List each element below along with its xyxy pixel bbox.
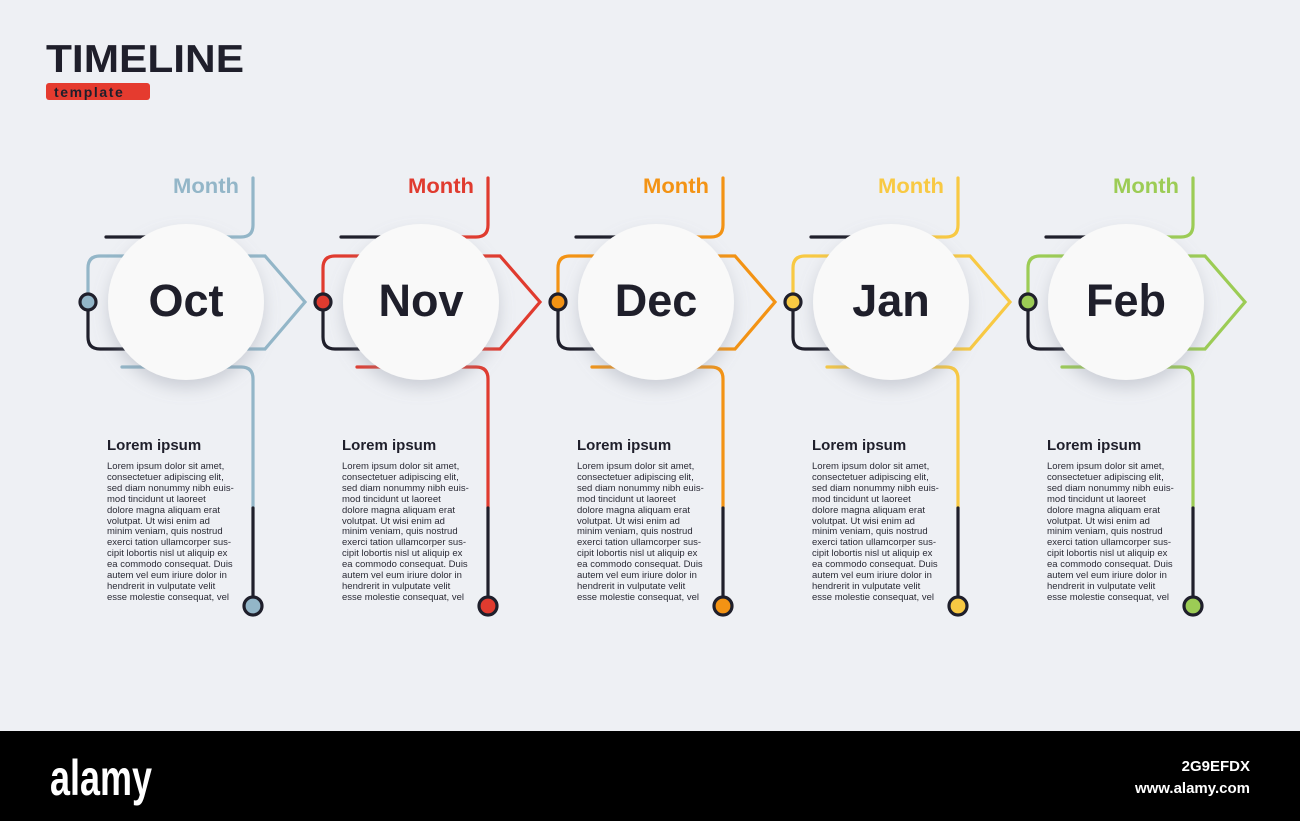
- text block: Feb: cipit lobortis nisl ut aliquip ex: [1047, 548, 1167, 559]
- text block: Oct: minim veniam, quis nostrud: [107, 526, 223, 537]
- text block: Oct: volutpat. Ut wisi enim ad: [107, 516, 210, 527]
- text block: Jan: sed diam nonummy nibh euis-: [812, 483, 939, 494]
- month label: Month: [643, 175, 709, 198]
- text block: Jan: mod tincidunt ut laoreet: [812, 494, 911, 505]
- text block: Oct: sed diam nonummy nibh euis-: [107, 483, 234, 494]
- text block: Oct: Lorem ipsum: [107, 437, 201, 454]
- text block: Feb: exerci tation ullamcorper sus-: [1047, 537, 1171, 548]
- step: Dec: [550, 175, 775, 615]
- title: [46, 38, 244, 100]
- text block: Oct: Lorem ipsum dolor sit amet,: [107, 461, 224, 472]
- title: TIMELINE: [46, 38, 244, 81]
- month circle: [578, 224, 734, 380]
- text block: Feb: consectetuer adipiscing elit,: [1047, 472, 1164, 483]
- text block: Dec: ea commodo consequat. Duis: [577, 559, 703, 570]
- text block: Jan: hendrerit in vulputate velit: [812, 581, 920, 592]
- step: Jan: [785, 175, 1010, 615]
- text block: Dec: exerci tation ullamcorper sus-: [577, 537, 701, 548]
- text block: Feb: sed diam nonummy nibh euis-: [1047, 483, 1174, 494]
- text block: Nov: mod tincidunt ut laoreet: [342, 494, 441, 505]
- step: Dec: Dec: [615, 275, 697, 326]
- text block: Feb: mod tincidunt ut laoreet: [1047, 494, 1146, 505]
- text block: Feb: ea commodo consequat. Duis: [1047, 559, 1173, 570]
- month circle: [343, 224, 499, 380]
- text block: Nov: hendrerit in vulputate velit: [342, 581, 450, 592]
- text block: Dec: dolore magna aliquam erat: [577, 505, 690, 516]
- text block: Oct: cipit lobortis nisl ut aliquip ex: [107, 548, 227, 559]
- text block: Dec: Lorem ipsum dolor sit amet,: [577, 461, 694, 472]
- text block: Nov: sed diam nonummy nibh euis-: [342, 483, 469, 494]
- text block: Dec: mod tincidunt ut laoreet: [577, 494, 676, 505]
- text block: Nov: [342, 437, 469, 603]
- footer bar: 2G9EFDX: [1182, 758, 1250, 775]
- text block: Jan: Lorem ipsum: [812, 437, 906, 454]
- text block: Nov: esse molestie consequat, vel: [342, 592, 464, 603]
- text block: Dec: sed diam nonummy nibh euis-: [577, 483, 704, 494]
- text block: Nov: autem vel eum iriure dolor in: [342, 570, 462, 581]
- text block: Feb: dolore magna aliquam erat: [1047, 505, 1160, 516]
- text block: Dec: Lorem ipsum: [577, 437, 671, 454]
- text block: Oct: consectetuer adipiscing elit,: [107, 472, 224, 483]
- text block: Oct: mod tincidunt ut laoreet: [107, 494, 206, 505]
- text block: Nov: consectetuer adipiscing elit,: [342, 472, 459, 483]
- month label: Month: [173, 175, 239, 198]
- text block: Nov: dolore magna aliquam erat: [342, 505, 455, 516]
- month circle: [108, 224, 264, 380]
- month circle: [813, 224, 969, 380]
- text block: Jan: volutpat. Ut wisi enim ad: [812, 516, 915, 527]
- text block: Feb: volutpat. Ut wisi enim ad: [1047, 516, 1150, 527]
- text block: Dec: esse molestie consequat, vel: [577, 592, 699, 603]
- text block: Nov: volutpat. Ut wisi enim ad: [342, 516, 445, 527]
- step: Oct: Oct: [148, 275, 224, 326]
- month circle: [1048, 224, 1204, 380]
- text block: Feb: Lorem ipsum dolor sit amet,: [1047, 461, 1164, 472]
- text block: Jan: ea commodo consequat. Duis: [812, 559, 938, 570]
- text block: Feb: autem vel eum iriure dolor in: [1047, 570, 1167, 581]
- text block: Dec: consectetuer adipiscing elit,: [577, 472, 694, 483]
- text block: Jan: exerci tation ullamcorper sus-: [812, 537, 936, 548]
- text block: Dec: hendrerit in vulputate velit: [577, 581, 685, 592]
- text block: Dec: cipit lobortis nisl ut aliquip ex: [577, 548, 697, 559]
- text block: Jan: dolore magna aliquam erat: [812, 505, 925, 516]
- step: Feb: [1020, 175, 1245, 615]
- text block: Feb: Lorem ipsum: [1047, 437, 1141, 454]
- footer bar: alamy: [50, 750, 152, 806]
- text block: Oct: esse molestie consequat, vel: [107, 592, 229, 603]
- subtitle tag: [46, 83, 150, 100]
- text block: Feb: hendrerit in vulputate velit: [1047, 581, 1155, 592]
- text block: Nov: Lorem ipsum: [342, 437, 436, 454]
- text block: Nov: Lorem ipsum dolor sit amet,: [342, 461, 459, 472]
- month label: Month: [878, 175, 944, 198]
- month label: Month: [408, 175, 474, 198]
- text block: Nov: ea commodo consequat. Duis: [342, 559, 468, 570]
- footer bar: www.alamy.com: [1134, 780, 1250, 797]
- text block: Oct: hendrerit in vulputate velit: [107, 581, 215, 592]
- text block: Oct: ea commodo consequat. Duis: [107, 559, 233, 570]
- text block: Nov: minim veniam, quis nostrud: [342, 526, 458, 537]
- text block: Dec: [577, 437, 704, 603]
- text block: Dec: volutpat. Ut wisi enim ad: [577, 516, 680, 527]
- text block: Feb: esse molestie consequat, vel: [1047, 592, 1169, 603]
- text block: Nov: cipit lobortis nisl ut aliquip ex: [342, 548, 462, 559]
- text block: Feb: [1047, 437, 1174, 603]
- step: Nov: [315, 175, 540, 615]
- text block: Dec: minim veniam, quis nostrud: [577, 526, 693, 537]
- text block: Jan: minim veniam, quis nostrud: [812, 526, 928, 537]
- text block: Jan: [812, 437, 939, 603]
- text block: Jan: esse molestie consequat, vel: [812, 592, 934, 603]
- text block: Dec: autem vel eum iriure dolor in: [577, 570, 697, 581]
- step: Jan: Jan: [852, 275, 930, 326]
- text block: Nov: exerci tation ullamcorper sus-: [342, 537, 466, 548]
- text block: Jan: Lorem ipsum dolor sit amet,: [812, 461, 929, 472]
- text block: Jan: cipit lobortis nisl ut aliquip ex: [812, 548, 932, 559]
- step: Nov: Nov: [378, 275, 464, 326]
- text block: Feb: minim veniam, quis nostrud: [1047, 526, 1163, 537]
- step: Oct: [80, 175, 305, 615]
- footer bar: [0, 731, 1300, 821]
- step: Feb: Feb: [1086, 275, 1166, 326]
- text block: Jan: consectetuer adipiscing elit,: [812, 472, 929, 483]
- text block: Oct: exerci tation ullamcorper sus-: [107, 537, 231, 548]
- text block: Oct: [107, 437, 234, 603]
- month label: Month: [1113, 175, 1179, 198]
- text block: Jan: autem vel eum iriure dolor in: [812, 570, 932, 581]
- subtitle tag: template: [54, 84, 124, 100]
- text block: Oct: dolore magna aliquam erat: [107, 505, 220, 516]
- text block: Oct: autem vel eum iriure dolor in: [107, 570, 227, 581]
